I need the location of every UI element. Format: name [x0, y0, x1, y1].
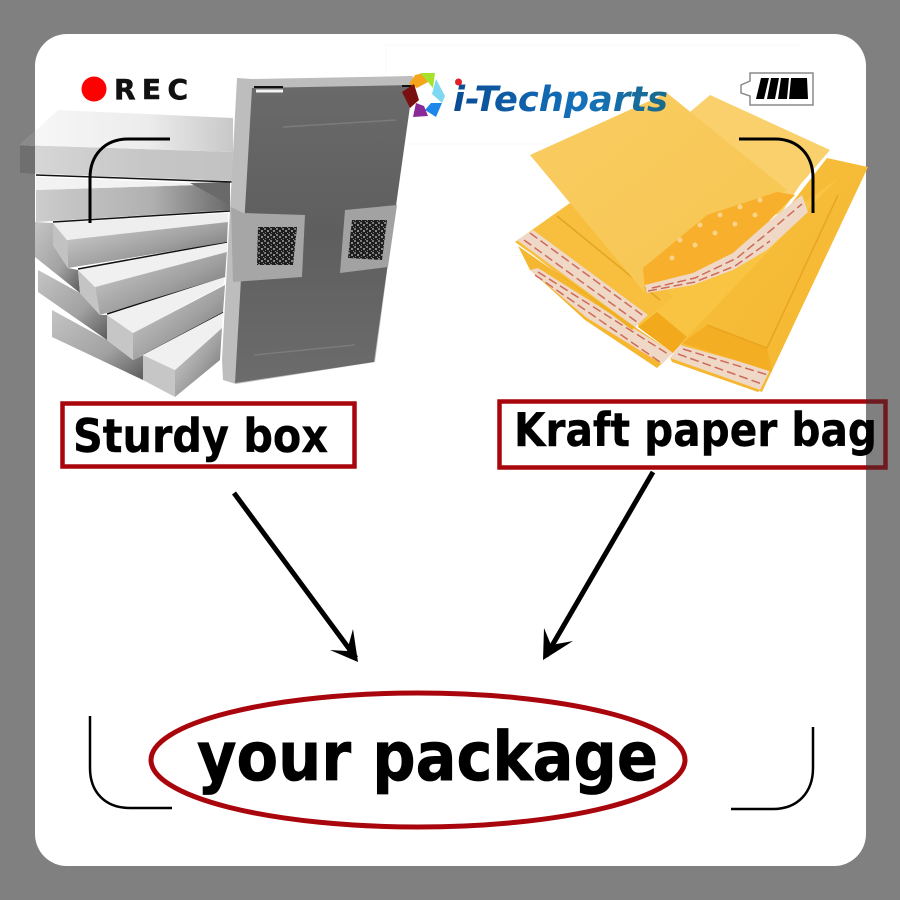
photo: stack of grey boxes	[20, 110, 233, 397]
logo dot	[455, 78, 462, 86]
logo backing frame	[386, 45, 800, 144]
icon: record indicator: REC	[114, 73, 188, 106]
corner bracket: bottom left	[90, 716, 172, 808]
oval: your package	[151, 693, 685, 827]
photo: upright box with QR labels	[222, 76, 414, 384]
label: Sturdy box: Sturdy box	[73, 409, 328, 463]
logo wordmark: i-Techparts	[453, 80, 668, 120]
photo: kraft paper bags	[515, 93, 868, 392]
logo mark	[402, 73, 445, 117]
corner bracket: top right	[739, 139, 813, 213]
icon: record indicator	[82, 73, 188, 106]
corner bracket: bottom right	[731, 727, 813, 809]
icon: battery	[741, 73, 813, 105]
logo: i-Techparts	[402, 73, 668, 120]
corner bracket: top left	[90, 139, 170, 223]
oval: your package: your package	[197, 718, 658, 797]
arrow: box to package	[234, 493, 358, 662]
arrow: bag to package	[543, 472, 653, 660]
